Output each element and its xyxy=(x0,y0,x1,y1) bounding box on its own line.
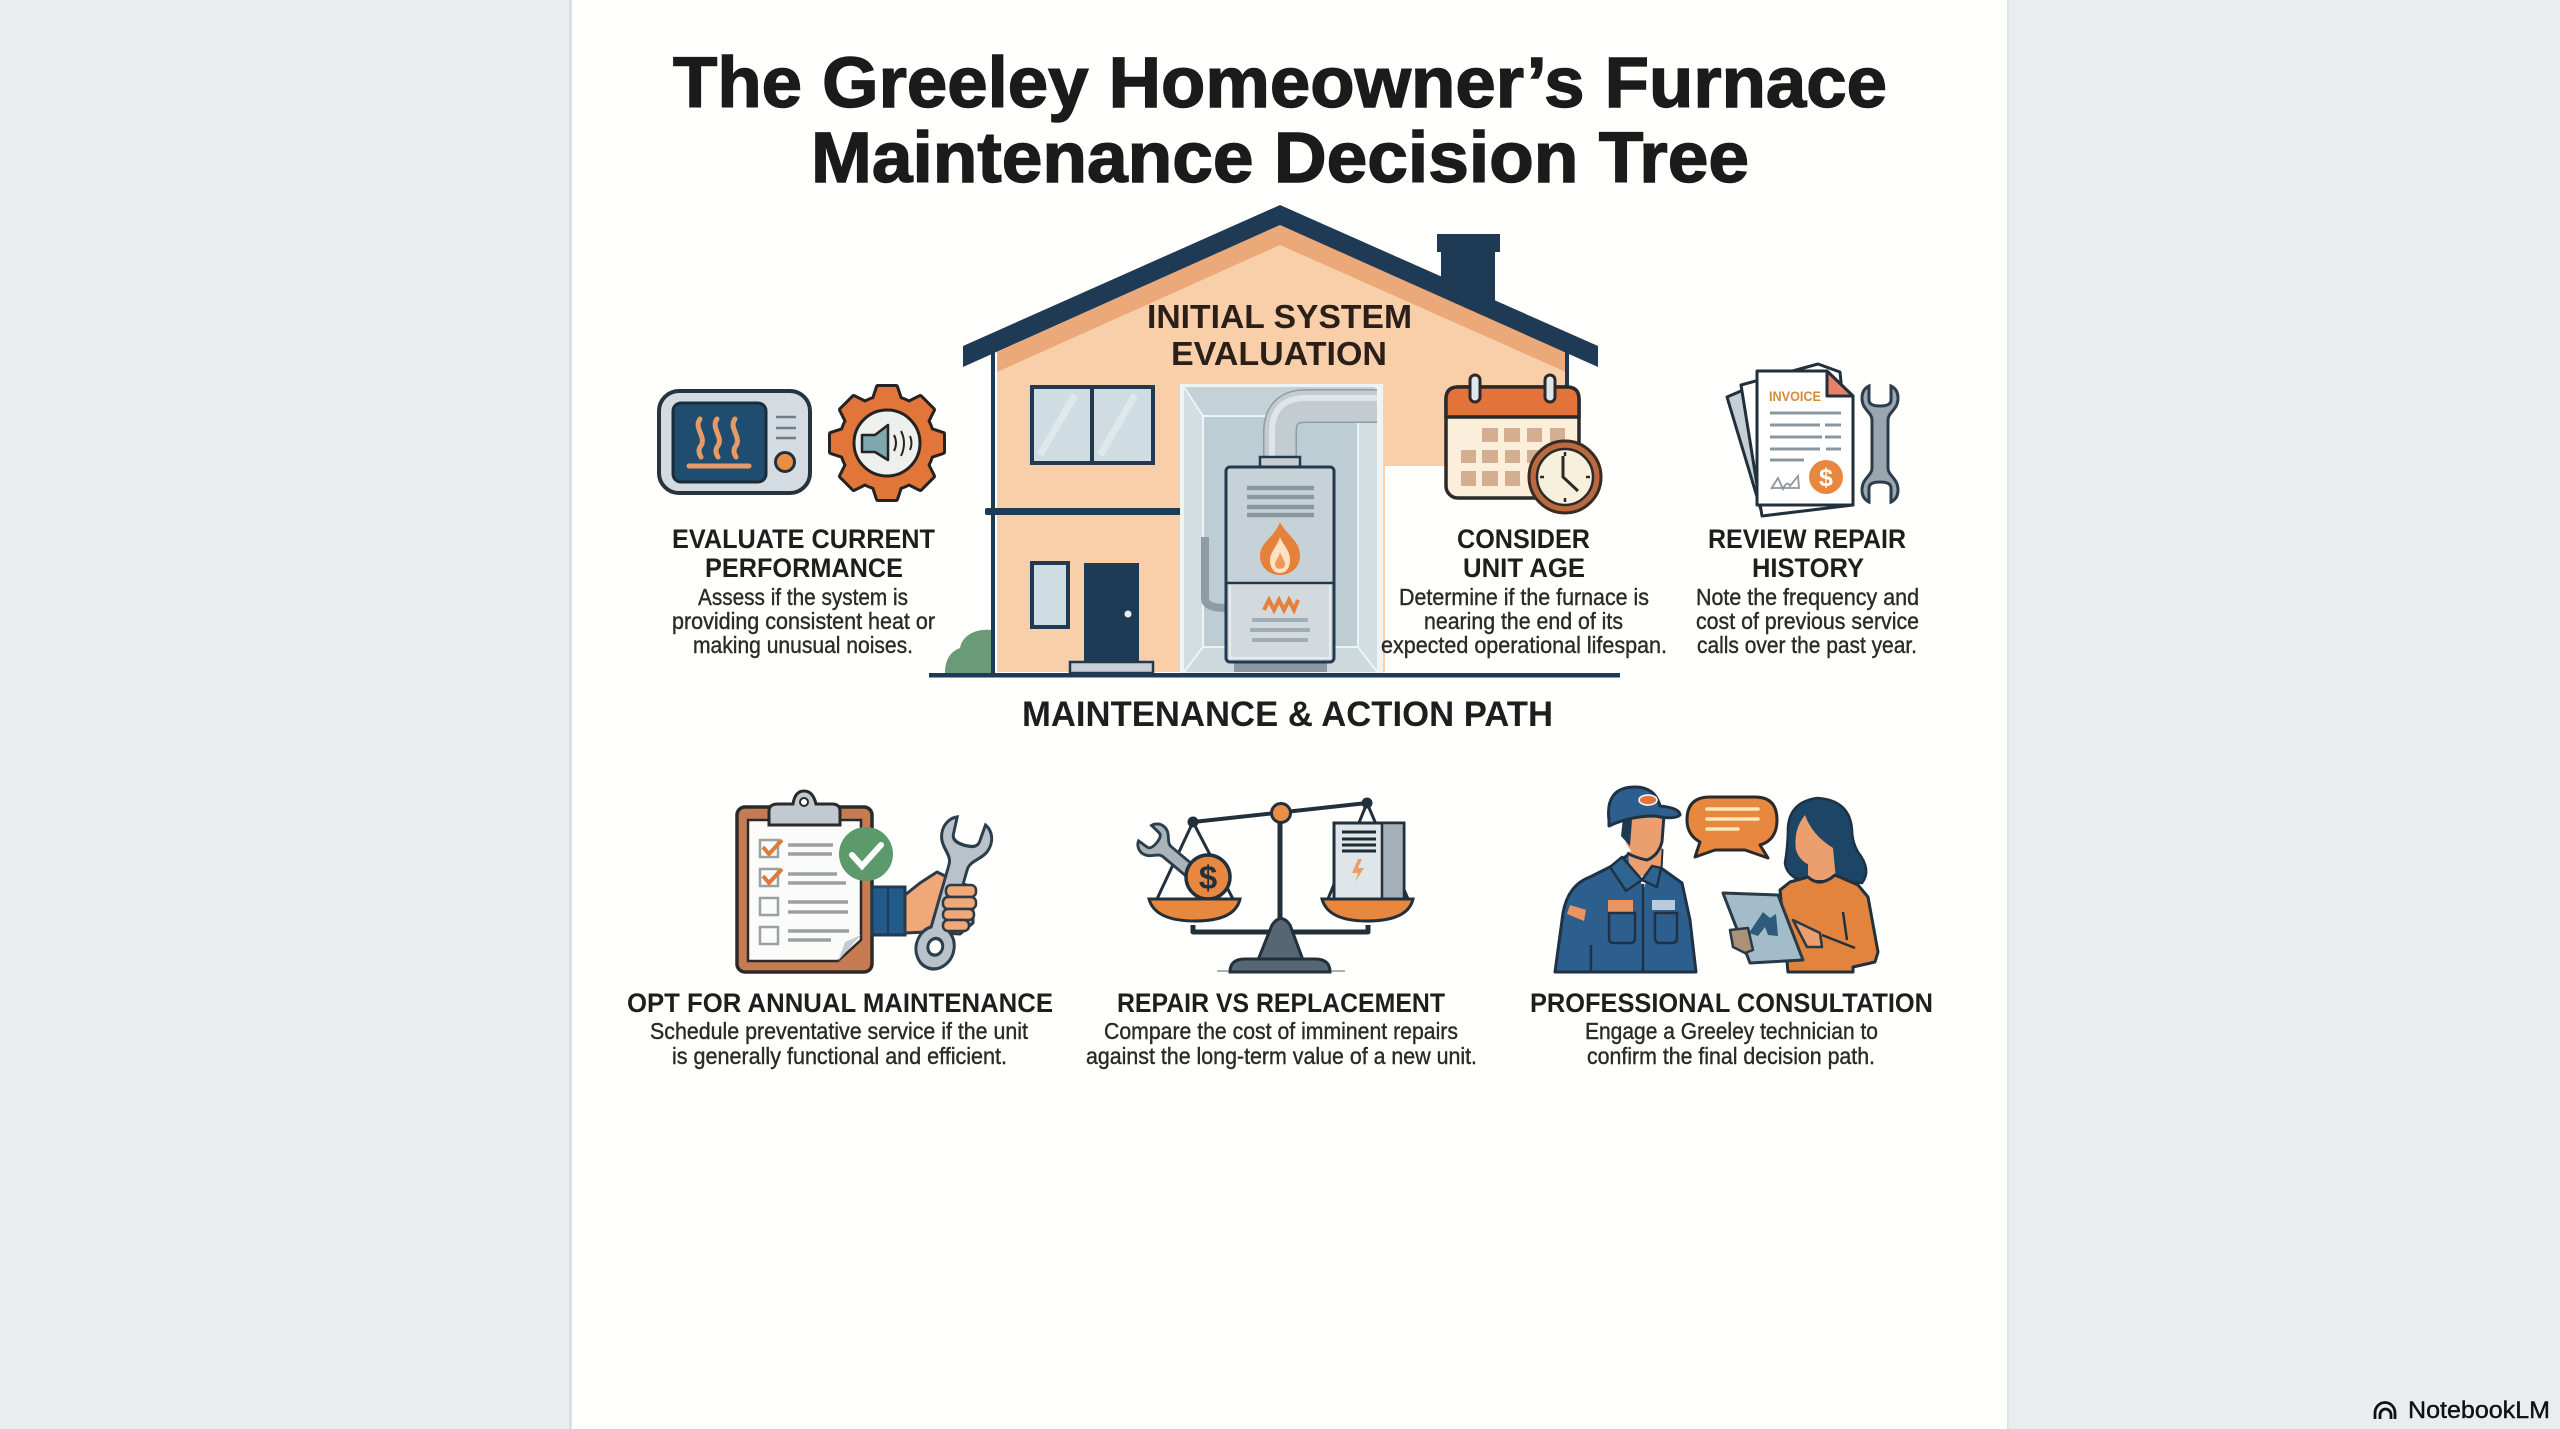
door step xyxy=(1070,662,1153,673)
furnace pipe xyxy=(1205,537,1226,608)
icon: homeowner with tablet xyxy=(1723,798,1878,972)
heading: REPAIR VS REPLACEMENT xyxy=(1117,988,1445,1018)
body text: is generally functional and efficient. xyxy=(672,1043,1007,1069)
ground line xyxy=(929,673,1620,678)
title: Maintenance Decision Tree xyxy=(811,119,1749,198)
heading: OPT FOR ANNUAL MAINTENANCE xyxy=(627,988,1053,1018)
heading: REVIEW REPAIR xyxy=(1708,524,1906,554)
title xyxy=(673,44,1887,198)
icon: balance scale xyxy=(1134,798,1413,972)
heading: CONSIDER xyxy=(1457,524,1590,554)
heading xyxy=(672,524,935,583)
panel: opt for annual maintenance xyxy=(627,791,1053,1069)
icon: hand holding wrench xyxy=(872,814,996,975)
watermark: NotebookLM: NotebookLM xyxy=(2408,1397,2550,1424)
icon: bush xyxy=(945,630,992,673)
body text: Assess if the system is xyxy=(698,584,908,610)
furnace recess xyxy=(1180,384,1383,674)
furnace unit xyxy=(1226,457,1334,672)
roof xyxy=(963,205,1598,367)
icon: wrench xyxy=(1862,386,1898,502)
body text xyxy=(1585,1018,1878,1069)
panel: white page xyxy=(572,0,2007,1429)
title: The Greeley Homeowner’s Furnace xyxy=(673,44,1887,123)
icon: calendar and clock xyxy=(1446,375,1601,513)
label: initial system evaluation: EVALUATION xyxy=(1171,335,1387,372)
section heading: maintenance and action path: MAINTENANCE & ACTION PATH xyxy=(1022,695,1553,734)
body text: Compare the cost of imminent repairs xyxy=(1104,1018,1458,1044)
panel: consider unit age xyxy=(1381,375,1667,658)
body text: confirm the final decision path. xyxy=(1587,1043,1875,1069)
panel: review repair history xyxy=(1696,364,1919,658)
icon: flame xyxy=(1260,522,1300,575)
label: initial system evaluation: INITIAL SYSTEM xyxy=(1147,298,1412,335)
body text: Note the frequency and xyxy=(1696,584,1919,610)
label: initial system evaluation xyxy=(1147,298,1412,372)
body text: nearing the end of its xyxy=(1424,608,1623,634)
body text: calls over the past year. xyxy=(1697,632,1917,658)
panel: repair vs replacement xyxy=(1086,798,1477,1069)
heading: EVALUATE CURRENT xyxy=(672,524,935,554)
body text: Determine if the furnace is xyxy=(1399,584,1649,610)
body text: providing consistent heat or xyxy=(672,608,935,634)
body text xyxy=(1381,584,1667,658)
heading: HISTORY xyxy=(1752,553,1864,583)
duct xyxy=(1272,398,1377,460)
heading: PERFORMANCE xyxy=(705,553,903,583)
body text: against the long-term value of a new unit. xyxy=(1086,1043,1477,1069)
upper window xyxy=(1032,387,1153,463)
floor band xyxy=(985,508,1181,515)
heading: PROFESSIONAL CONSULTATION xyxy=(1530,988,1933,1018)
icon: invoice stack: INVOICE xyxy=(1769,388,1821,404)
icon: clipboard checklist xyxy=(737,791,893,972)
lower window xyxy=(1032,563,1068,627)
icon: invoice stack xyxy=(1727,364,1853,516)
house walls xyxy=(997,225,1566,672)
icon: speech bubble xyxy=(1687,797,1777,858)
icon: balance scale: $ xyxy=(1199,859,1217,896)
chimney xyxy=(1437,234,1500,318)
body text xyxy=(672,584,935,658)
panel: professional consultation xyxy=(1530,787,1933,1069)
door xyxy=(1084,563,1139,663)
illustration: house with furnace xyxy=(929,205,1620,678)
icon: gear with speaker xyxy=(831,387,943,499)
body text: cost of previous service xyxy=(1696,608,1919,634)
body text xyxy=(650,1018,1028,1069)
body text xyxy=(1696,584,1919,658)
body text xyxy=(1086,1018,1477,1069)
body text: Schedule preventative service if the unit xyxy=(650,1018,1028,1044)
body text: making unusual noises. xyxy=(693,632,913,658)
icon: invoice stack: $ xyxy=(1819,464,1833,492)
icon: thermostat xyxy=(659,391,810,493)
body text: expected operational lifespan. xyxy=(1381,632,1667,658)
body text: Engage a Greeley technician to xyxy=(1585,1018,1878,1044)
icon: technician xyxy=(1555,787,1696,972)
panel: evaluate current performance xyxy=(659,387,943,658)
heading xyxy=(1708,524,1906,583)
heading: UNIT AGE xyxy=(1463,553,1585,583)
heading xyxy=(1457,524,1590,583)
